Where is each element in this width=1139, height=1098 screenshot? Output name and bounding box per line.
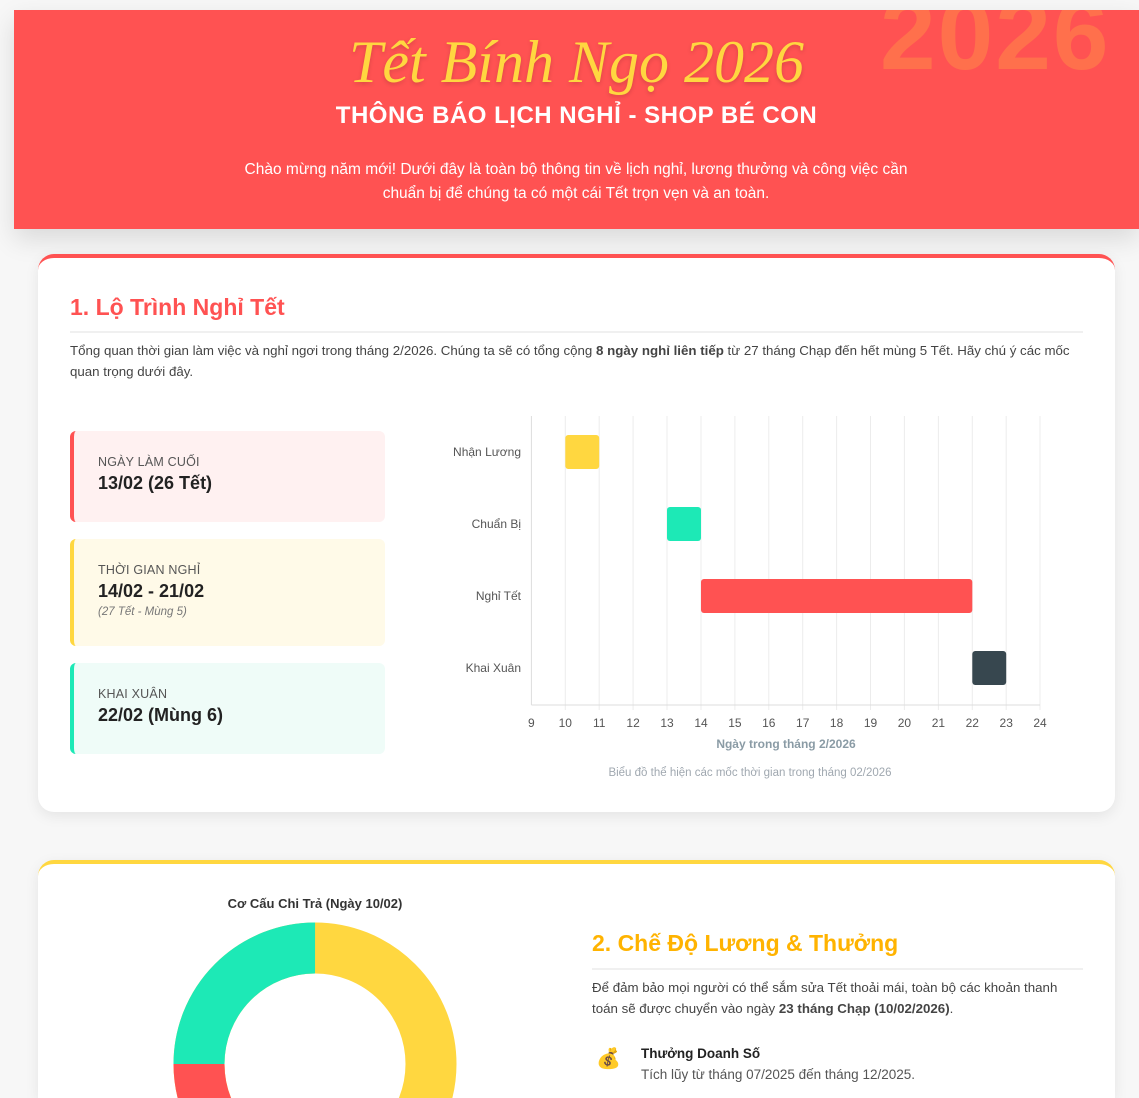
info card: reopen: 22/02 (Mùng 6) — [98, 705, 223, 725]
icon: money bag: 💰 — [596, 1048, 621, 1070]
subtitle: THÔNG BÁO LỊCH NGHỈ - SHOP BÉ CON — [336, 102, 817, 129]
item: sales bonus: Tích lũy từ tháng 07/2025 đến tháng 12/2025. — [641, 1067, 915, 1082]
info card: reopen — [70, 663, 385, 754]
heading: 2. Chế Độ Lương & Thưởng — [592, 930, 898, 956]
gantt chart: Nghỉ Tết — [476, 589, 522, 603]
title: Tết Bính Ngọ 2026 — [349, 29, 804, 95]
gantt chart: 11 — [593, 716, 606, 730]
donut chart title: Cơ Cấu Chi Trả (Ngày 10/02) — [228, 896, 402, 911]
info card: last work day: NGÀY LÀM CUỐI — [98, 455, 200, 469]
gantt chart: 18 — [830, 716, 844, 730]
gantt chart: 23 — [1000, 716, 1013, 730]
gantt chart — [453, 416, 1047, 779]
description: Để đảm bảo mọi người có thể sắm sửa Tết thoải mái, toàn bộ các khoản thanh toán sẽ được chuyển vào ngày 23 tháng Chạp (10/02/2026). — [592, 980, 1057, 1016]
gantt chart: 17 — [796, 716, 810, 730]
gantt chart: 21 — [932, 716, 945, 730]
info card: last work day: 13/02 (26 Tết) — [98, 473, 212, 493]
gantt chart: 19 — [864, 716, 877, 730]
gantt chart: 24 — [1033, 716, 1047, 730]
gantt chart: Khai Xuân — [466, 661, 521, 675]
gantt chart: Ngày trong tháng 2/2026 — [716, 737, 856, 751]
header banner — [14, 10, 1139, 229]
bars — [565, 435, 1006, 685]
gantt chart: 12 — [626, 716, 640, 730]
donut chart — [174, 922, 456, 1098]
heading: 1. Lộ Trình Nghỉ Tết — [70, 294, 285, 320]
info card: holiday — [70, 539, 385, 646]
gantt chart: 15 — [728, 716, 742, 730]
gantt chart: Chuẩn Bị — [472, 517, 521, 531]
gantt chart: Nhận Lương — [453, 445, 521, 459]
info card: reopen: KHAI XUÂN — [98, 687, 167, 701]
panel: schedule — [38, 254, 1115, 812]
info card: last work day — [70, 431, 385, 522]
gantt chart: 20 — [898, 716, 911, 730]
gantt chart: Biểu đồ thể hiện các mốc thời gian trong tháng 02/2026 — [608, 767, 892, 779]
panel: salary — [38, 860, 1115, 1098]
description: Tổng quan thời gian làm việc và nghỉ ngơi trong tháng 2/2026. Chúng ta sẽ có tổng cộng 8 ngày nghỉ liên tiếp từ 27 tháng Chạp đến hết mùng 5 Tết. Hãy chú ý các mốc quan trọng dưới đây. — [70, 343, 1070, 379]
intro text: Chào mừng năm mới! Dưới đây là toàn bộ thông tin về lịch nghỉ, lương thưởng và công việc cần chuẩn bị để chúng ta có một cái Tết trọn vẹn và an toàn. — [245, 161, 907, 202]
info card: holiday: 14/02 - 21/02 — [98, 581, 204, 601]
item: sales bonus: Thưởng Doanh Số — [641, 1046, 760, 1061]
gantt chart: 13 — [660, 716, 674, 730]
info card: holiday: (27 Tết - Mùng 5) — [98, 606, 187, 618]
gantt chart: 16 — [762, 716, 776, 730]
gantt chart: 22 — [966, 716, 979, 730]
info card: holiday: THỜI GIAN NGHỈ — [98, 563, 200, 577]
gantt chart: 9 — [528, 716, 535, 730]
gantt chart: 10 — [559, 716, 572, 730]
gantt chart: 14 — [694, 716, 708, 730]
item: sales bonus — [596, 1046, 915, 1082]
